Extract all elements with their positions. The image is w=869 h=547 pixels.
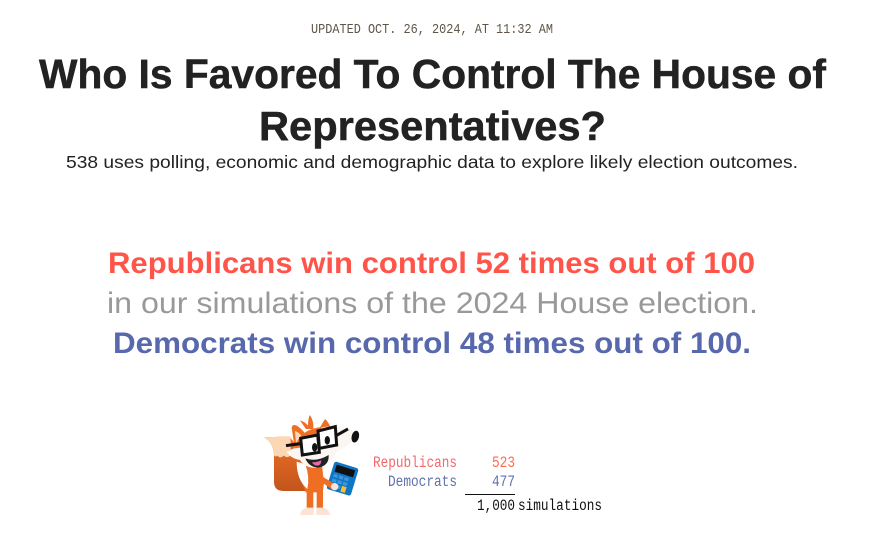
simulation context: in our simulations of the 2024 House election.: [107, 287, 758, 320]
fox glasses: [286, 427, 348, 455]
simulation tally: 523: [492, 454, 515, 472]
simulation tally: [373, 454, 602, 515]
democrats row: Democrats: [388, 473, 457, 491]
fox eyes: [312, 443, 317, 452]
fox tail: [264, 436, 309, 491]
title: Who Is Favored To Control The House of: [39, 51, 826, 97]
simulation tally: 477: [492, 473, 515, 491]
title: [39, 51, 826, 149]
updated timestamp: UPDATED OCT. 26, 2024, AT 11:32 AM: [311, 22, 553, 38]
forecast summary: [107, 247, 758, 360]
fox nose: [350, 430, 360, 443]
subtitle: 538 uses polling, economic and demographic data to explore likely election outcomes.: [66, 152, 798, 172]
fox mouth: [305, 455, 329, 468]
republicans row: Republicans: [373, 454, 457, 472]
republican odds: Republicans win control 52 times out of 100: [108, 247, 755, 280]
fox legs and feet: [307, 488, 323, 509]
fox ears and tuft: [292, 425, 307, 448]
total row: 1,000: [477, 497, 515, 515]
fox body: [300, 462, 324, 492]
fox arm: [309, 471, 334, 489]
title: Representatives?: [259, 103, 606, 149]
icon: fox with glasses and calculator: [264, 415, 360, 515]
simulation tally: simulations: [518, 497, 602, 515]
calculator: [326, 461, 359, 496]
sum line: [465, 494, 515, 495]
democrat odds: Democrats win control 48 times out of 100.: [113, 327, 751, 360]
fox head: [287, 426, 357, 468]
